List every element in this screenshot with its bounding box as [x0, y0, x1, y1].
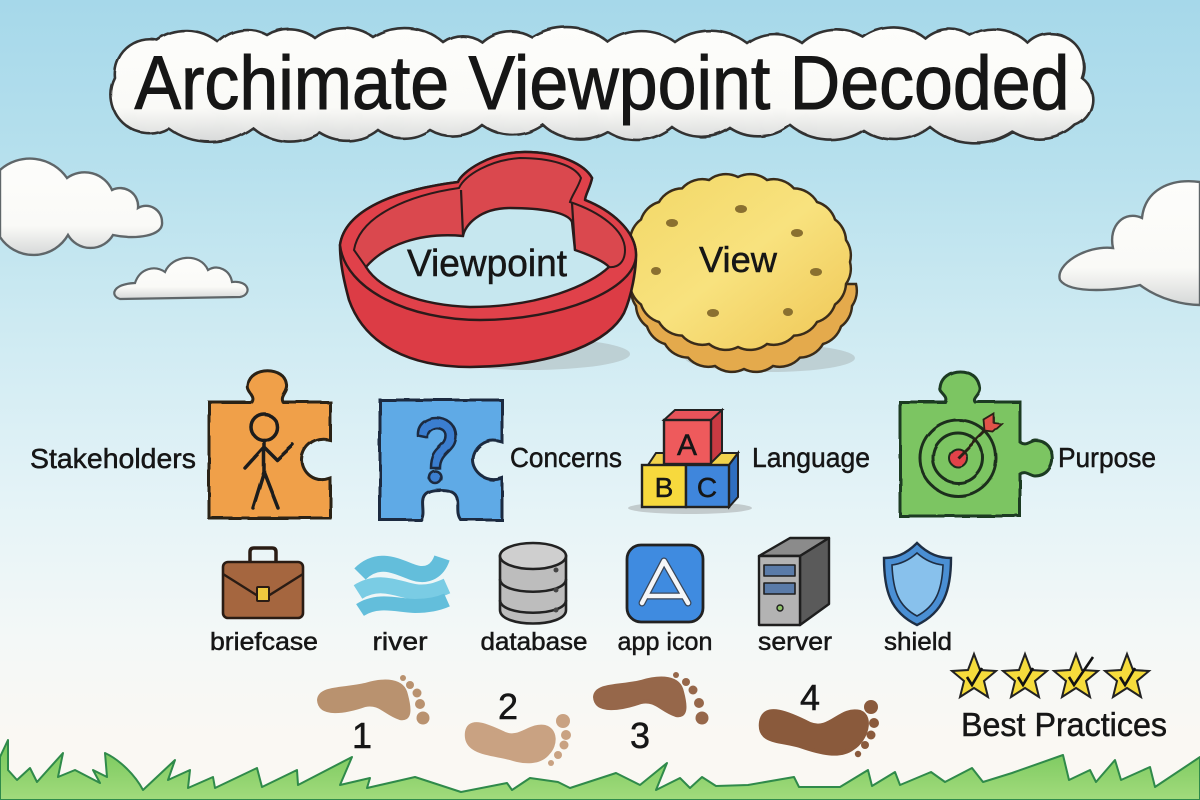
icon: river [358, 558, 447, 610]
label: stakeholders: Stakeholders [30, 443, 196, 474]
toy blocks: language: B [655, 472, 673, 503]
cookie: view [625, 174, 857, 372]
cloud: left large [0, 159, 162, 255]
label: language: Language [752, 442, 870, 473]
cloud: left small [114, 258, 248, 299]
step number 3: 3 [630, 715, 650, 756]
icon: briefcase [223, 548, 303, 618]
puzzle piece: purpose [900, 372, 1052, 516]
cookie cutter: viewpoint: Viewpoint [407, 243, 567, 285]
label: purpose: Purpose [1058, 442, 1156, 473]
label: database: database [480, 628, 588, 656]
icon: database [500, 543, 566, 624]
step number 2: 2 [498, 686, 518, 727]
cookie cutter: viewpoint [340, 152, 636, 370]
footprint 1 [319, 675, 430, 724]
footprint 2 [467, 714, 571, 766]
step number 1: 1 [352, 715, 372, 756]
toy blocks: language [628, 410, 752, 514]
cookie: view: View [699, 239, 778, 280]
label: shield: shield [884, 628, 952, 656]
icon: app icon [627, 545, 703, 622]
toy blocks: language: C [697, 472, 717, 503]
icon: server [759, 538, 829, 625]
label: concerns: Concerns [510, 442, 622, 473]
icon: shield [884, 543, 951, 625]
label: river: river [372, 628, 428, 656]
label: app icon: app icon [618, 628, 712, 656]
icon: four stars with check marks [952, 654, 1149, 697]
toy blocks: language: A [677, 429, 697, 462]
footprint 4 [761, 700, 879, 757]
cloud: right [1059, 181, 1200, 305]
footprint 3 [595, 672, 708, 724]
grass strip [0, 740, 1200, 800]
label: briefcase: briefcase [210, 628, 318, 656]
title: Archimate Viewpoint Decoded [134, 41, 1070, 126]
title cloud banner [111, 27, 1093, 143]
label: best practices: Best Practices [961, 706, 1167, 743]
label: server: server [758, 628, 832, 656]
puzzle piece: stakeholders [209, 371, 330, 518]
step number 4: 4 [800, 677, 820, 718]
puzzle piece: concerns [380, 400, 502, 520]
